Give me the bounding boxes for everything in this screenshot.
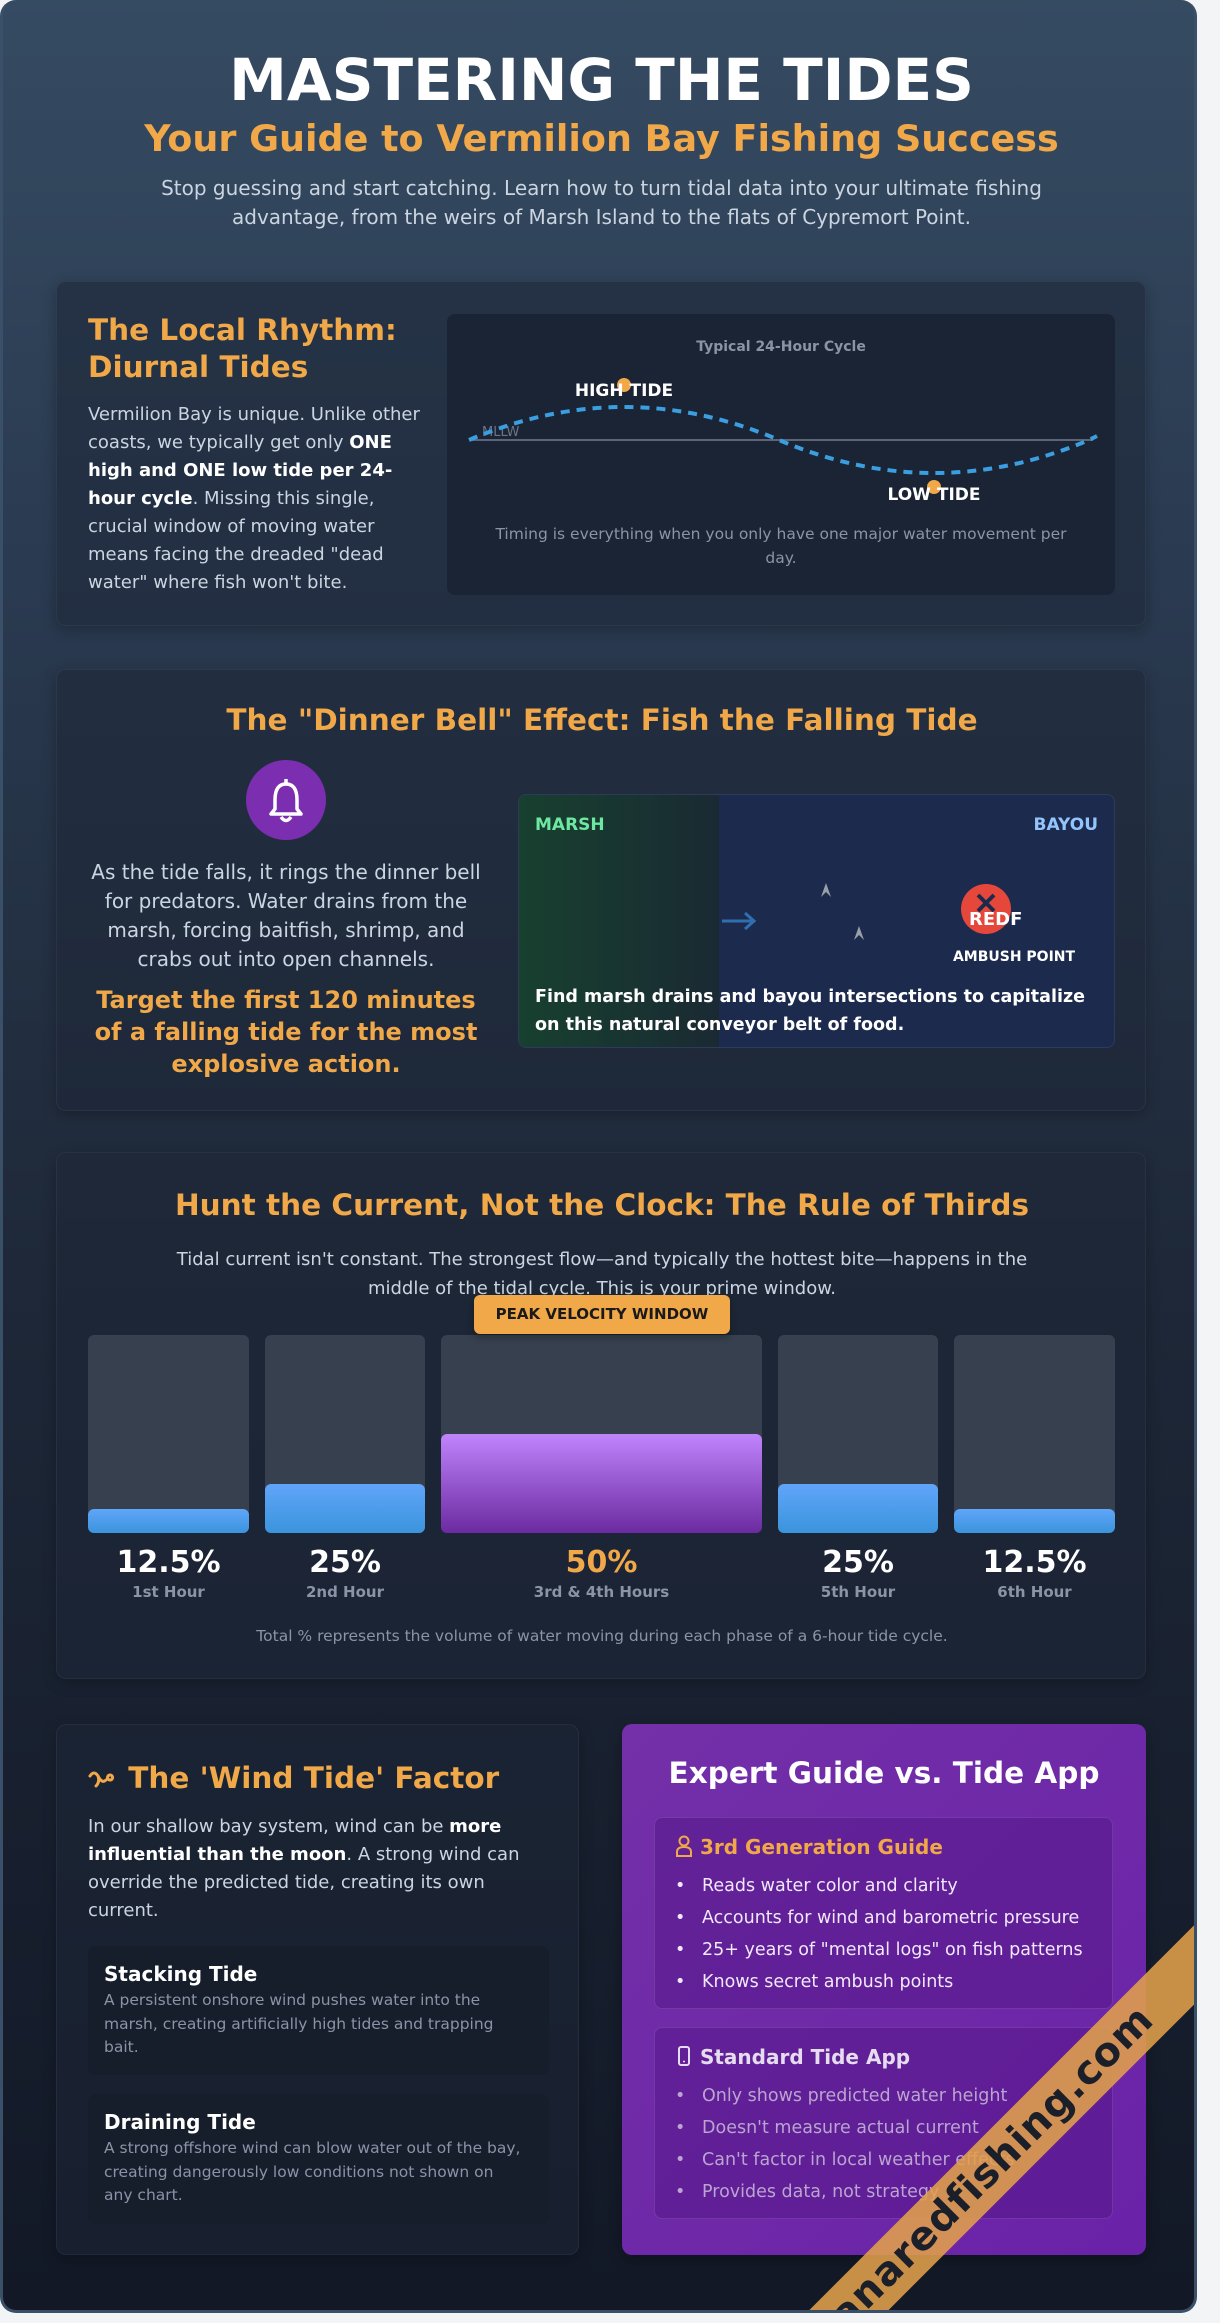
chart: 24-hour tide cycle: LOW TIDE [888, 485, 980, 505]
card: 3rd generation guide: • Knows secret ambush points [675, 1972, 953, 1992]
heading: Hunt the Current, Not the Clock: The Rule of Thirds [175, 1188, 1029, 1222]
panel: rule of thirds [56, 1152, 1146, 1679]
sub-panel: stacking tide [88, 1946, 549, 2075]
icon: bell [246, 760, 326, 840]
bar chart: 25% [822, 1545, 894, 1580]
diagram: marsh to bayou: MARSH [535, 815, 605, 835]
footnote: Total % represents the volume of water moving during each phase of a 6-hour tide cycle. [256, 1627, 948, 1645]
bar chart: 25% [309, 1545, 381, 1580]
chart: 24-hour tide cycle: MLLW [482, 425, 520, 440]
bar chart: 12.5% [116, 1545, 221, 1580]
sub-panel: stacking tide: A persistent onshore wind pushes water into the marsh, creating artificially high tides and trapping bait. [104, 1991, 494, 2056]
heading: Expert Guide vs. Tide App [669, 1756, 1099, 1790]
diagram: marsh to bayou: REDF [969, 909, 1022, 930]
badge: peak velocity window [474, 1295, 730, 1334]
panel: expert guide vs tide app [622, 1724, 1146, 2255]
text block: Vermilion Bay is unique. Unlike other coasts, we typically get only ONE high and ONE low tide per 24-hour cycle. Missing this single, crucial window of moving water means facing the dreaded "dead water" where fish won't bite. [88, 404, 420, 593]
card: 3rd generation guide: 3rd Generation Guide [700, 1835, 943, 1859]
bar chart: 2nd Hour [306, 1583, 384, 1601]
bar chart [88, 1294, 1115, 1601]
heading: diurnal tides: Diurnal Tides [88, 350, 308, 384]
text block: As the tide falls, it rings the dinner bell for predators. Water drains from the marsh, forcing baitfish, shrimp, and crabs out into open channels. [91, 860, 481, 971]
chart: 24-hour tide cycle: Timing is everything when you only have one major water movement per [494, 525, 1067, 543]
sub-panel: draining tide: Draining Tide [104, 2110, 256, 2134]
card: standard tide app [654, 2027, 1113, 2219]
title: MASTERING THE TIDES [229, 46, 974, 114]
card: standard tide app: Standard Tide App [700, 2045, 910, 2069]
intro text: Stop guessing and start catching. Learn how to turn tidal data into your ultimate fishing advantage, from the weirs of Marsh Island to the flats of Cypremort Point. [161, 176, 1042, 229]
diagram: marsh to bayou [518, 794, 1115, 1048]
chart: 24-hour tide cycle: Typical 24-Hour Cycle [696, 339, 866, 355]
panel: dinner bell [56, 669, 1146, 1111]
chart: 24-hour tide cycle [447, 314, 1115, 595]
subtitle: Your Guide to Vermilion Bay Fishing Success [144, 117, 1059, 160]
heading: diurnal tides [88, 313, 397, 384]
sub-panel: draining tide [88, 2094, 549, 2224]
heading with icon: The 'Wind Tide' Factor [128, 1761, 499, 1795]
bar chart: 1st Hour [132, 1583, 205, 1601]
diagram: marsh to bayou: BAYOU [1034, 815, 1098, 835]
diagram: marsh to bayou: AMBUSH POINT [953, 949, 1076, 965]
card: standard tide app: • Doesn't measure actual current [675, 2118, 979, 2138]
card: 3rd generation guide: • Reads water color and clarity [675, 1876, 958, 1896]
sub-panel: draining tide: A strong offshore wind can blow water out of the bay, creating dangerously low conditions not shown on any chart. [104, 2139, 520, 2204]
diagram: marsh to bayou: Find marsh drains and bayou intersections to capitalize on this natural conveyor belt of food. [535, 987, 1085, 1035]
card: standard tide app: • Provides data, not strategy [675, 2182, 939, 2202]
chart: 24-hour tide cycle: HIGH TIDE [575, 381, 673, 401]
heading: The "Dinner Bell" Effect: Fish the Falling Tide [226, 703, 978, 737]
chart: 24-hour tide cycle: day. [765, 549, 797, 567]
bar chart: 6th Hour [997, 1583, 1072, 1601]
card: standard tide app: • Can't factor in local weather effects [675, 2150, 1014, 2170]
bar chart: 5th Hour [821, 1583, 895, 1601]
panel: wind tide [56, 1724, 579, 2255]
heading: diurnal tides: The Local Rhythm: [88, 313, 397, 347]
text block: Tidal current isn't constant. The strongest flow—and typically the hottest bite—happens in the middle of the tidal cycle. This is your prime window. [177, 1249, 1027, 1299]
bar chart: 12.5% [982, 1545, 1087, 1580]
card: 3rd generation guide: • Accounts for wind and barometric pressure [675, 1908, 1079, 1928]
bar chart: 3rd & 4th Hours [534, 1583, 669, 1601]
card: 3rd generation guide: • 25+ years of "mental logs" on fish patterns [675, 1940, 1083, 1960]
watermark band [574, 1839, 1220, 2323]
bar chart: 50% [566, 1545, 637, 1580]
callout: target first 120 minutes: Target the first 120 minutes of a falling tide for the most explosive action. [95, 986, 477, 1078]
badge: peak velocity window: PEAK VELOCITY WINDOW [496, 1305, 708, 1323]
card: standard tide app: • Only shows predicted water height [675, 2086, 1007, 2106]
panel: local rhythm [56, 281, 1146, 626]
text block: In our shallow bay system, wind can be more influential than the moon. A strong wind can override the predicted tide, creating its own current. [88, 1816, 519, 1921]
sub-panel: stacking tide: Stacking Tide [104, 1962, 257, 1986]
card: 3rd generation guide [654, 1817, 1113, 2009]
